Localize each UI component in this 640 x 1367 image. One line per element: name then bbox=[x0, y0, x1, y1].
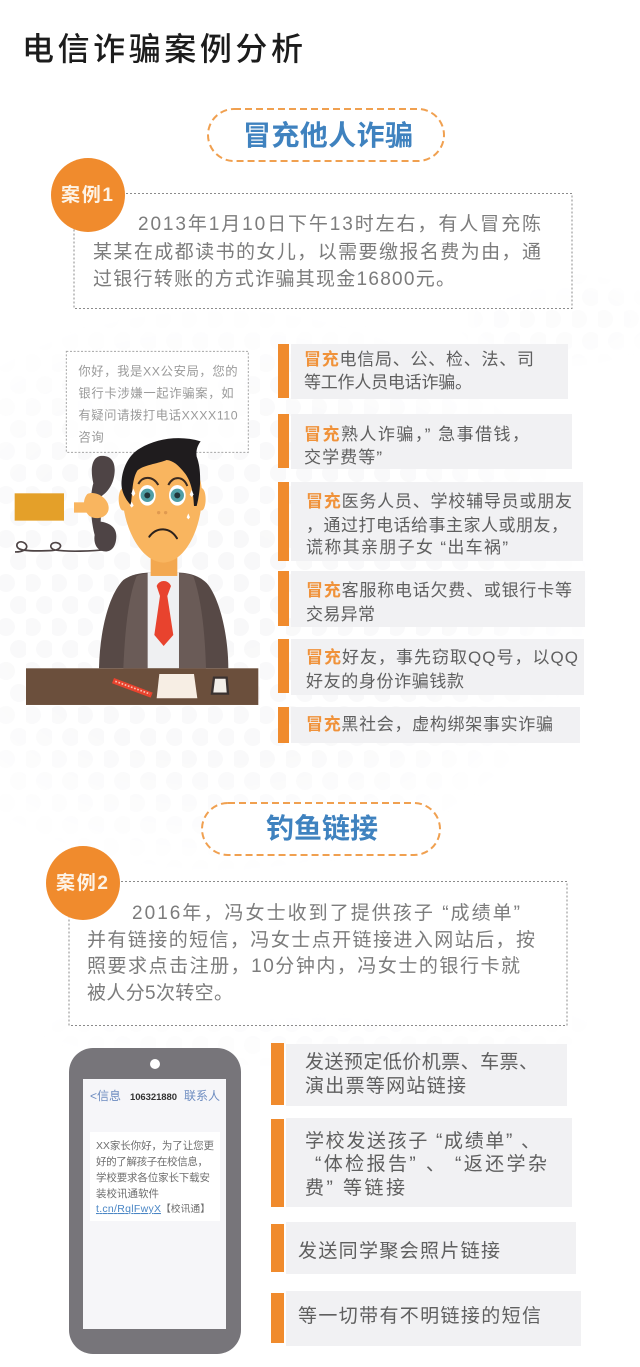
speech bubble: 你好，我是XX公安局，您的 bbox=[78, 363, 238, 378]
badge: case 2: 案例2 bbox=[56, 871, 108, 894]
item: 熟人 bbox=[278, 414, 572, 469]
item: 黑社会: 冒充黑社会，虚构绑架事实诈骗 bbox=[306, 714, 553, 734]
item: 电信局 bbox=[278, 344, 568, 399]
speech bubble: 咨询 bbox=[78, 430, 104, 445]
section heading: 冒充他人诈骗: 冒充他人诈骗 bbox=[243, 120, 413, 151]
panel: case 1 bbox=[51, 158, 572, 308]
text: case 1 description bbox=[93, 213, 541, 290]
badge: case 2 bbox=[46, 846, 120, 920]
item: 电信局: 等工作人员电话诈骗。 bbox=[304, 373, 472, 392]
item: 电信局: 冒充电信局、公、检、法、司 bbox=[304, 349, 534, 369]
illustration: man on the phone bbox=[15, 351, 258, 705]
phone nav bar: <信息 bbox=[90, 1088, 121, 1103]
text: case 1 description: 2013年1月10日下午13时左右，有人冒充陈 bbox=[138, 213, 541, 235]
text: case 2 description bbox=[87, 902, 535, 1004]
section heading: 钓鱼链接 bbox=[202, 803, 440, 855]
text: case 1 description: 某某在成都读书的女儿，以需要缴报名费为由，通 bbox=[93, 241, 541, 263]
item: 客服: 冒充客服称电话欠费、或银行卡等 bbox=[306, 580, 572, 600]
item: 医务人员: 谎称其亲朋子女 “出车祸” bbox=[306, 538, 508, 557]
item: 好友: 好友的身份诈骗钱款 bbox=[306, 672, 464, 691]
item: 低价机票 bbox=[271, 1043, 567, 1106]
item: 黑社会 bbox=[278, 707, 580, 743]
item: 熟人: 交学费等” bbox=[304, 448, 382, 467]
SMS message: t.cn/RqlFwyX bbox=[96, 1203, 161, 1215]
SMS message: XX家长你好，为了让您更 bbox=[96, 1139, 214, 1152]
item: 成绩单: “体检报告” 、 “返还学杂 bbox=[315, 1153, 547, 1175]
text: case 1 description: 过银行转账的方式诈骗其现金16800元。 bbox=[93, 268, 455, 290]
speech bubble: 有疑问请拨打电话XXXX110 bbox=[78, 407, 238, 422]
item: 医务人员: 冒充医务人员、学校辅导员或朋友 bbox=[306, 491, 572, 511]
text: case 2 description: 2016年，冯女士收到了提供孩子 “成绩单” bbox=[132, 902, 520, 924]
item: 低价机票: 演出票等网站链接 bbox=[305, 1075, 466, 1097]
item: 成绩单: 费” 等链接 bbox=[305, 1177, 405, 1199]
illustration: phone with SMS bbox=[69, 1048, 241, 1354]
title: 电信诈骗案例分析 bbox=[22, 31, 303, 67]
item: 不明链接: 等一切带有不明链接的短信 bbox=[298, 1305, 541, 1327]
item: 低价机票: 发送预定低价机票、车票、 bbox=[305, 1051, 538, 1073]
phone nav bar: 106321880 bbox=[130, 1092, 177, 1103]
item: 同学聚会: 发送同学聚会照片链接 bbox=[298, 1240, 500, 1262]
item: 同学聚会 bbox=[271, 1222, 576, 1274]
text: case 2 description: 照要求点击注册，10分钟内，冯女士的银行卡就 bbox=[87, 955, 520, 977]
badge: case 1: 案例1 bbox=[61, 183, 113, 206]
item: 成绩单 bbox=[271, 1118, 572, 1207]
item: 熟人: 冒充熟人诈骗，” 急事借钱， bbox=[304, 424, 529, 444]
text: case 2 description: 并有链接的短信，冯女士点开链接进入网站后，按 bbox=[87, 929, 535, 951]
item: 好友 bbox=[278, 639, 584, 695]
SMS message: 装校讯通软件 bbox=[96, 1187, 159, 1200]
SMS message: 好的了解孩子在校信息， bbox=[96, 1155, 208, 1168]
figure: head bbox=[119, 438, 206, 563]
icon: telephone and hand bbox=[15, 456, 116, 552]
item: 不明链接 bbox=[271, 1291, 581, 1346]
list: impersonation types bbox=[278, 344, 585, 743]
text: case 2 description: 被人分5次转空。 bbox=[87, 982, 233, 1004]
SMS message bbox=[90, 1132, 220, 1221]
phone nav bar bbox=[90, 1088, 220, 1103]
section heading: 钓鱼链接: 钓鱼链接 bbox=[266, 813, 378, 844]
SMS message: 学校要求各位家长下载安 bbox=[96, 1171, 210, 1184]
item: 客服 bbox=[278, 571, 585, 627]
item: 好友: 冒充好友，事先窃取QQ号，以QQ bbox=[306, 647, 578, 667]
item: 医务人员 bbox=[278, 482, 583, 561]
item: 成绩单: 学校发送孩子 “成绩单” 、 bbox=[305, 1130, 540, 1152]
speech bubble: 银行卡涉嫌一起诈骗案，如 bbox=[78, 385, 234, 400]
speech bubble bbox=[66, 351, 248, 452]
SMS message: 【校讯通】 bbox=[161, 1202, 210, 1215]
badge: case 1 bbox=[51, 158, 125, 232]
item: 医务人员: ，通过打电话给事主家人或朋友， bbox=[306, 516, 568, 535]
section heading: 冒充他人诈骗 bbox=[208, 109, 444, 161]
figure: suit and tie bbox=[99, 553, 228, 668]
desk with objects bbox=[26, 668, 258, 705]
item: 客服: 交易异常 bbox=[306, 605, 375, 624]
phone nav bar: 联系人 bbox=[184, 1089, 220, 1103]
list: phishing links bbox=[271, 1043, 581, 1346]
panel: case 2 bbox=[46, 846, 567, 1026]
